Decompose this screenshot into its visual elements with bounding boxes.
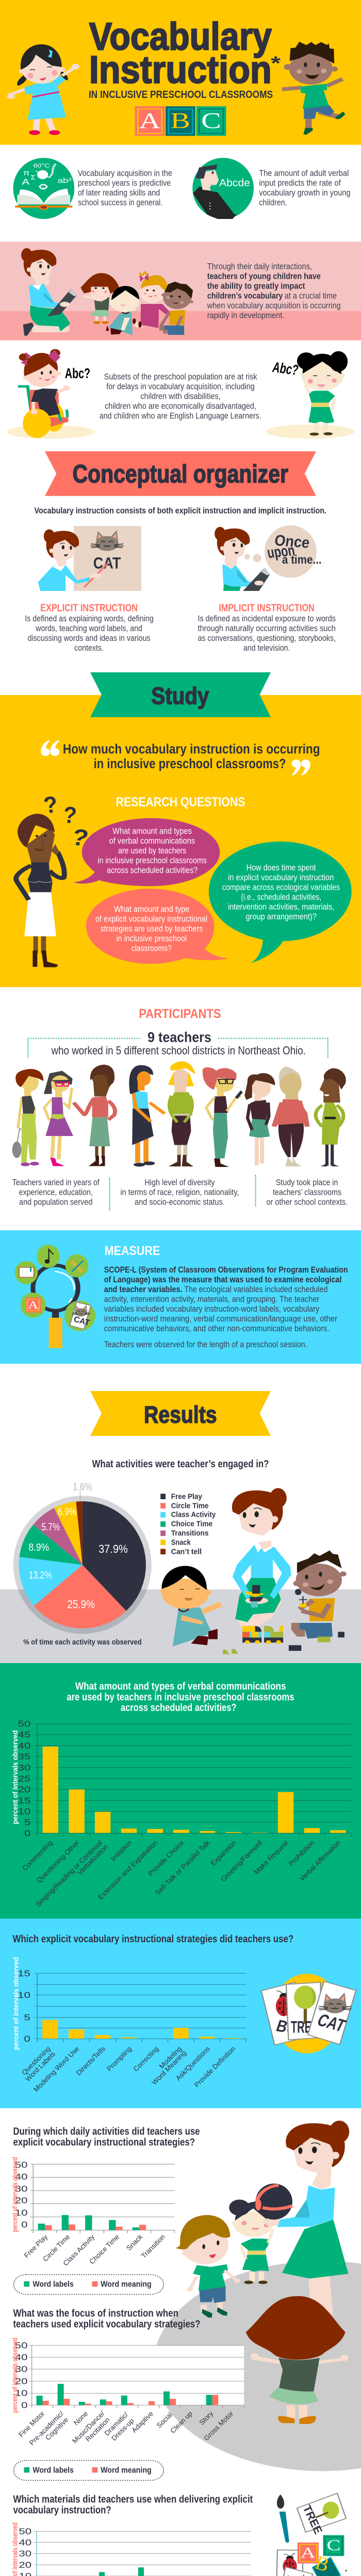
legend: activities: Can’t tell: [171, 1547, 202, 1556]
bar chart: focus of instruction: 30: [15, 2365, 28, 2374]
panel: measure: [0, 1230, 361, 1364]
axis labels: verbal communications: Verbal Affirmation: [298, 1839, 342, 1883]
text block: explicit instruction: words, teaching word labels, and: [35, 624, 142, 633]
text block: measure: [104, 1244, 348, 1349]
heading: focus question: What was the focus of instruction when: [13, 2308, 178, 2319]
text block: children at risk: [100, 372, 261, 421]
speech bubble: instructional strategies question: strategies are used by teachers: [101, 924, 203, 934]
illustration: boy in green shirt: [282, 42, 346, 135]
panel: teachers impact band: [0, 242, 361, 341]
heading: daily activities question: explicit vocabulary instructional strategies?: [13, 2137, 195, 2148]
icon: magnifying glass with activity bubbles: [15, 1245, 95, 1348]
axis labels: explicit strategies: Prompting: [105, 2045, 133, 2073]
illustration: classroom materials: [276, 2493, 350, 2576]
axis labels: verbal communications: Expansion: [209, 1839, 238, 1867]
axis labels: daily activities: Snack: [125, 2233, 144, 2252]
heading ribbon: Results: Results: [144, 1401, 217, 1428]
illustration: explicit instruction teacher with CAT card: [38, 526, 141, 591]
heading: focus question: [13, 2308, 200, 2330]
icon: open book and science symbols: [13, 158, 74, 219]
teacher 3: [74, 1065, 115, 1166]
icon: man speaking Abcde: Abcde: [219, 177, 250, 189]
axis labels: verbal communications: Imitation: [109, 1839, 133, 1863]
legend: activities: Free Play: [171, 1492, 202, 1501]
bar chart: daily activities: 50: [15, 2160, 28, 2170]
bar chart: verbal communications: 5: [24, 1818, 30, 1827]
bar chart: focus of instruction: [11, 2338, 244, 2413]
axis labels: explicit strategies: Provide Definition: [193, 2045, 237, 2089]
speech bubble: verbal communications question: [73, 818, 220, 886]
axis labels: focus of instruction: Recitation: [84, 2416, 111, 2443]
text block: teachers can impact vocabulary: [207, 262, 341, 320]
pie chart: percent of time per activity: 8.9%: [28, 1541, 49, 1553]
panel: header: [0, 0, 361, 145]
axis labels: verbal communications: Provide Choice: [146, 1839, 186, 1877]
heading: research questions: RESEARCH QUESTIONS: [116, 795, 245, 809]
illustration: four seated children: [80, 272, 193, 335]
heading: materials question: [13, 2494, 253, 2516]
text block: diversity: [120, 1178, 239, 1207]
pie chart: percent of time per activity: 1.6%: [73, 1481, 92, 1493]
bar chart: focus of instruction: 20: [15, 2377, 28, 2386]
axis labels: focus of instruction: None: [72, 2410, 89, 2427]
icon: open book and science symbols: ab²: [58, 176, 72, 184]
text block: experience: experience, education,: [19, 1188, 93, 1197]
bar chart: verbal communications: 30: [18, 1763, 30, 1773]
axis labels: explicit strategies: Directs/Tells: [75, 2045, 107, 2077]
illustration: thinking woman: ?: [69, 824, 91, 852]
title: Vocabulary: [89, 14, 272, 58]
text: 9 teachers: 9 teachers: [147, 1029, 211, 1045]
speech bubble: instructional strategies question: [86, 889, 228, 964]
axis labels: verbal communications: Self-Talk or Parallel Talk: [154, 1839, 211, 1896]
speech bubble: instructional strategies question: What amount and type: [114, 905, 189, 914]
heading: verbal communications question: [67, 1681, 294, 1714]
text block: diversity: and socio-economic status.: [135, 1198, 225, 1207]
title: *: [271, 53, 281, 74]
teacher 7: [244, 1073, 275, 1165]
bar chart: daily activities: 20: [15, 2196, 28, 2206]
text block: explicit instruction: [25, 602, 154, 653]
caption: pie: % of time each activity was observed: [23, 1638, 142, 1646]
illustration: word cards: TREE: [291, 2019, 318, 2037]
axis labels: focus of instruction: Dramatic/: [103, 2411, 129, 2437]
axis labels: focus of instruction: Music/Dance/: [71, 2410, 106, 2445]
speech bubble: ecological variables question: [209, 841, 352, 963]
panel: activities pie section: [0, 1458, 361, 1663]
bar chart: daily activities: 0: [21, 2220, 28, 2230]
text block: explicit instruction: EXPLICIT INSTRUCTION: [40, 602, 138, 614]
bar chart: verbal communications: 45: [18, 1730, 30, 1740]
heading: participants: PARTICIPANTS: [139, 1007, 221, 1021]
illustration: girl in blue dress: [7, 44, 79, 135]
panel: materials chart: [11, 2493, 350, 2576]
text block: reading skills: Vocabulary acquisition in the: [78, 169, 172, 178]
icon: ABC blocks: C: [201, 108, 221, 133]
panel: children at risk: [7, 349, 355, 439]
axis labels: focus of instruction: Adaptive: [130, 2410, 155, 2434]
text block: reading skills: [78, 169, 172, 208]
heading: focus question: teachers used explicit vocabulary strategies?: [13, 2318, 200, 2330]
illustration: classroom materials: C: [326, 2536, 340, 2554]
legend: daily activities: Word labels: [32, 2280, 74, 2289]
bar chart: verbal communications: [11, 1719, 351, 1838]
text block: diversity: in terms of race, religion, nationality,: [120, 1188, 239, 1197]
speech bubble: instructional strategies question: in inclusive preschool: [116, 934, 187, 943]
text block: measure: and teacher variables.: [104, 1285, 183, 1294]
axis labels: verbal communications: Greeting/Farewell: [219, 1839, 264, 1883]
text block: implicit instruction: [198, 602, 336, 653]
illustration: implicit instruction teacher with speech bubble: [215, 526, 322, 591]
illustration: teacher reading: [21, 248, 76, 336]
axis labels: verbal communications: Verbalization: [76, 1843, 109, 1876]
legend: activities: [160, 1492, 216, 1556]
speech bubble: ecological variables question: How does time spent: [247, 863, 316, 873]
bar chart: verbal communications: 15: [18, 1796, 30, 1806]
text block: reading skills: preschool years is predictive: [78, 179, 171, 188]
bar chart: daily activities: 30: [15, 2184, 28, 2194]
panel: intro two columns: [13, 158, 350, 219]
illustration: word cards: [261, 1974, 356, 2054]
text block: children at risk: children who are economically disadvantaged,: [105, 402, 256, 411]
labels: materials illustration: [282, 2503, 332, 2576]
axis labels: focus of instruction: [17, 2410, 235, 2447]
icon: ABC blocks: B: [170, 108, 190, 133]
bar chart: verbal communications: 40: [18, 1741, 30, 1751]
illustration: toy blocks train: [223, 1626, 344, 1654]
axis labels: verbal communications: Make Request: [253, 1839, 290, 1876]
speech bubble: verbal communications question: of verbal communications: [109, 837, 195, 846]
bar chart: materials: 50: [19, 2527, 31, 2536]
axis labels: focus of instruction: Clean up: [169, 2410, 194, 2435]
bar chart: focus of instruction: 0: [21, 2401, 28, 2410]
label: Abc? right: Abc?: [271, 359, 300, 379]
pie chart: percent of time per activity: [13, 1481, 152, 1634]
bar chart: verbal communications: 35: [18, 1752, 30, 1761]
panel: participant details: [12, 1176, 348, 1210]
panel: study background: [0, 695, 361, 987]
icon: ABC blocks: A: [139, 108, 161, 133]
pie chart: percent of time per activity: 13.2%: [29, 1569, 52, 1581]
heading ribbon: Conceptual organizer: [45, 451, 316, 496]
axis labels: focus of instruction: Social: [155, 2411, 174, 2430]
axis labels: daily activities: Transition: [140, 2233, 167, 2260]
axis labels: verbal communications: Extension and Expatiation: [96, 1839, 159, 1901]
axis labels: explicit strategies: Modeling Word Use: [32, 2045, 80, 2093]
heading: materials question: vocabulary instruction?: [13, 2504, 111, 2516]
bar chart: daily activities: 40: [15, 2172, 28, 2182]
heading ribbon: Study: [90, 672, 271, 717]
axis labels: verbal communications: Commenting: [21, 1839, 54, 1872]
text block: children at risk: children with disabilities,: [140, 392, 221, 401]
teacher 2: [44, 1071, 73, 1166]
axis labels: focus of instruction: Story: [198, 2410, 215, 2427]
teacher 9: [316, 1068, 346, 1166]
quote: main study question: [41, 740, 320, 775]
axis labels: focus of instruction: Dress-up: [110, 2417, 136, 2442]
panel: explicit strategies chart: [0, 1919, 361, 2108]
panel: study questions: [16, 740, 352, 967]
icon: man speaking Abcde: [192, 158, 254, 219]
panel: grey backdrop illustration: [0, 2261, 361, 2471]
axis labels: verbal communications: Prohibition: [287, 1839, 316, 1868]
bar chart: focus of instruction: percent of intervals observed: [11, 2338, 19, 2413]
icon: open book and science symbols: π: [23, 168, 30, 177]
bar chart: verbal communications: 20: [18, 1785, 30, 1794]
heading ribbon: Results: [90, 1391, 271, 1436]
axis labels: daily activities: Circle Time: [41, 2233, 72, 2263]
title: [89, 14, 281, 91]
axis labels: verbal communications: Questioning-Other: [35, 1839, 81, 1885]
bar chart: materials: 20: [19, 2561, 31, 2570]
axis labels: focus of instruction: Gross Motor: [202, 2410, 235, 2442]
pie chart: percent of time per activity: 25.9%: [67, 1598, 95, 1611]
illustration: thinking woman: ?: [42, 792, 59, 818]
bar chart: verbal communications: 10: [18, 1807, 30, 1817]
illustration: teacher and children: [175, 2121, 349, 2424]
teacher 1: [12, 1069, 43, 1166]
panel: conceptual organizer: [25, 506, 336, 653]
bar chart: verbal communications: 50: [18, 1719, 30, 1729]
bar chart: focus of instruction: 10: [15, 2388, 28, 2398]
text: 9 teachers: [51, 1029, 306, 1057]
icon: open book and science symbols: Σ: [30, 174, 36, 181]
bar chart: explicit strategies: 15: [18, 1969, 30, 1978]
illustration: nine teachers: [12, 1061, 346, 1167]
legend: daily activities: [14, 2275, 163, 2294]
axis labels: explicit strategies: Word Labels: [24, 2050, 57, 2083]
text block: measure: MEASURE: [105, 1244, 160, 1258]
teacher 8: [274, 1066, 309, 1166]
axis labels: daily activities: Free Play: [23, 2233, 49, 2259]
text block: study settings: [267, 1178, 348, 1207]
bar chart: materials: 30: [19, 2549, 31, 2558]
speech bubble: ecological variables question: group arrangement)?: [245, 912, 317, 922]
bar chart: daily activities: [11, 2157, 174, 2233]
text block: implicit instruction: and television.: [243, 643, 290, 653]
teacher 6: [203, 1067, 243, 1167]
text block: experience: and population served: [19, 1198, 92, 1207]
heading: daily activities question: [13, 2126, 200, 2148]
illustration: implicit instruction teacher with speech bubble: upon: [266, 541, 296, 562]
bar chart: daily activities: 10: [15, 2208, 28, 2218]
axis labels: focus of instruction: Cognitive: [44, 2416, 70, 2442]
text block: children at risk: Subsets of the preschool population are at risk: [104, 372, 257, 382]
legend: activities: Snack: [171, 1538, 191, 1547]
axis labels: explicit strategies: Correcting: [132, 2045, 160, 2073]
text block: children at risk: for delays in vocabulary acquisition, including: [106, 382, 255, 392]
illustration: boy with toy: [291, 1550, 347, 1639]
illustration: girl in green dress: [266, 351, 355, 438]
illustration: thinking woman: [16, 792, 91, 967]
icon: ABC blocks: [135, 106, 226, 136]
illustration: explicit instruction teacher with CAT card: CAT: [93, 554, 121, 572]
pie chart: percent of time per activity: 5.7%: [41, 1521, 60, 1533]
text block: reading skills: school success in general.: [78, 198, 162, 208]
speech bubble: verbal communications question: What amount and types: [112, 827, 192, 836]
bar chart: explicit strategies: percent of intervals observed: [12, 1957, 20, 2050]
pie chart: percent of time per activity: 6.9%: [58, 1506, 76, 1518]
speech bubble: verbal communications question: in inclusive preschool classrooms: [97, 856, 207, 866]
illustration: implicit instruction teacher with speech bubble: Once: [273, 531, 311, 551]
teacher 4: [129, 1065, 165, 1166]
axis labels: explicit strategies: [20, 2045, 237, 2093]
text block: explicit instruction: contexts.: [74, 643, 104, 653]
icon: open book and science symbols: 60°C: [34, 163, 50, 169]
panel: verbal communications chart: [0, 1663, 361, 1919]
heading ribbon: Study: Study: [151, 682, 209, 709]
legend: activities: Transitions: [171, 1529, 208, 1537]
text block: explicit instruction: discussing words and ideas in various: [28, 634, 151, 643]
illustration: child in teal dress: [160, 1566, 221, 1647]
axis labels: explicit strategies: Questioning: [20, 2045, 52, 2077]
axis labels: focus of instruction: Pre-academic/: [28, 2410, 65, 2447]
bar chart: verbal communications: 0: [24, 1829, 30, 1838]
text block: reading skills: of later reading skills and: [78, 189, 160, 198]
text block: experience: [12, 1178, 100, 1207]
heading: verbal communications question: across scheduled activities?: [121, 1702, 236, 1714]
illustration: classroom materials: A: [301, 2544, 316, 2561]
text block: adult verbal input: children.: [259, 198, 287, 208]
bar chart: daily activities: percent of intervals observed: [11, 2157, 19, 2232]
text block: teachers can impact vocabulary: rapidly in development.: [207, 311, 284, 320]
illustration: implicit instruction teacher with speech bubble: a time...: [282, 553, 322, 566]
text block: explicit instruction: Is defined as explaining words, defining: [25, 614, 154, 623]
axis labels: explicit strategies: Modeling: [158, 2045, 183, 2070]
axis labels: explicit strategies: Ask/Questions: [174, 2045, 211, 2082]
axis labels: focus of instruction: Fine Motor: [17, 2410, 46, 2438]
labels: materials illustration: B: [313, 2552, 332, 2576]
legend: focus of instruction: [14, 2461, 163, 2480]
axis labels: verbal communications: [21, 1839, 342, 1908]
illustration: girl in wheelchair: [7, 349, 95, 439]
bar chart: materials: 40: [19, 2538, 31, 2548]
speech bubble: instructional strategies question: classrooms?: [132, 944, 172, 953]
axis labels: verbal communications: Singing/Reading or Continual: [34, 1839, 104, 1908]
label: Abc? left: Abc?: [65, 365, 90, 382]
icon: open book and science symbols: A: [22, 177, 30, 187]
axis labels: daily activities: [23, 2233, 167, 2267]
bar chart: verbal communications: 25: [18, 1774, 30, 1784]
bar chart: explicit strategies: 5: [24, 2013, 30, 2023]
icon: magnifying glass with activity bubbles: A: [28, 1299, 39, 1311]
bar chart: focus of instruction: 50: [15, 2341, 28, 2350]
legend: activities: Circle Time: [171, 1501, 209, 1510]
axis labels: daily activities: Class Activity: [61, 2233, 96, 2267]
speech bubble: instructional strategies question: of explicit vocabulary instructional: [95, 914, 207, 924]
bar chart: materials: [11, 2522, 251, 2576]
legend: activities: Class Activity: [171, 1510, 216, 1519]
label: CAT card in measure icon: CAT: [73, 1315, 91, 1328]
illustration: teacher playing with children: [232, 1488, 291, 1626]
panel: daily activities chart: [11, 2121, 349, 2424]
legend: daily activities: Word meaning: [101, 2280, 152, 2289]
bar chart: explicit strategies: [12, 1957, 247, 2050]
panel: participants: [12, 1007, 346, 1167]
speech bubble: verbal communications question: across scheduled activities?: [107, 866, 198, 875]
bar chart: verbal communications: percent of intervals observed: [11, 1730, 19, 1824]
legend: focus of instruction: Word labels: [32, 2466, 74, 2475]
axis labels: explicit strategies: Word Meaning: [151, 2049, 188, 2087]
text block: diversity: High level of diversity: [144, 1178, 215, 1188]
teacher 5: [168, 1061, 195, 1166]
legend: focus of instruction: Word meaning: [101, 2466, 152, 2475]
illustration: word cards: BUG: [274, 2017, 311, 2040]
labels: materials illustration: TREE: [300, 2503, 325, 2536]
bar chart: explicit strategies: 10: [18, 1991, 30, 2000]
text block: teachers can impact vocabulary: the ability to greatly impact: [207, 282, 305, 291]
title: Instruction: [89, 47, 272, 91]
text block: experience: Teachers varied in years of: [12, 1178, 100, 1188]
text block: children at risk: and children who are English Language Learners.: [100, 412, 261, 421]
legend: activities: Choice Time: [171, 1519, 212, 1528]
text block: teachers can impact vocabulary: children’s vocabulary: [207, 292, 283, 301]
heading: daily activities question: During which daily activities did teachers use: [13, 2126, 200, 2137]
bar chart: focus of instruction: 40: [15, 2353, 28, 2362]
text block: adult verbal input: [259, 169, 350, 208]
pie chart: percent of time per activity: 37.9%: [99, 1543, 128, 1555]
illustration: thinking woman: ?: [62, 802, 78, 828]
axis labels: daily activities: Choice Time: [88, 2233, 121, 2266]
text block: teachers can impact vocabulary: Through their daily interactions,: [207, 262, 312, 272]
bar chart: explicit strategies: 0: [24, 2035, 30, 2044]
speech bubble: verbal communications question: are used by teachers: [118, 846, 186, 856]
panel: focus of instruction chart: [11, 2338, 244, 2480]
